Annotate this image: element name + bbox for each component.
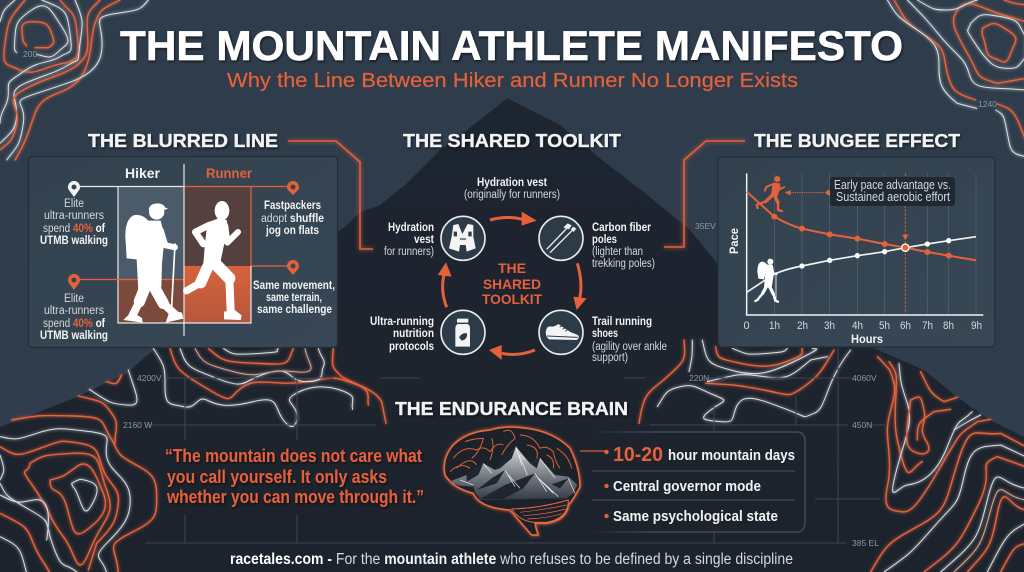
x axis labels: 3h bbox=[824, 320, 835, 332]
hiker label: Hiker bbox=[125, 165, 161, 181]
icon: trail shoe bbox=[539, 310, 583, 354]
quote: you call yourself. It only asks bbox=[167, 466, 387, 487]
fact: mountain days bbox=[604, 444, 795, 466]
pin: fastpackers bbox=[287, 181, 299, 195]
text: same movement: Same movement, bbox=[253, 280, 335, 292]
x axis labels bbox=[744, 320, 982, 332]
elevation labels: 1240 bbox=[978, 99, 997, 109]
icon: carbon poles bbox=[539, 216, 583, 260]
runner silhouette bbox=[187, 201, 242, 320]
quote: “The mountain does not care what bbox=[165, 445, 422, 466]
text: carbon fiber poles: Carbon fiber bbox=[592, 222, 651, 234]
text: walking top: spend 40% of bbox=[43, 223, 105, 235]
text: walking bottom bbox=[40, 293, 108, 342]
text: nutrition protocols: nutrition bbox=[393, 328, 434, 340]
contour lines: top left bbox=[0, 0, 148, 160]
x axis labels: 2h bbox=[797, 320, 808, 332]
y axis label: Pace bbox=[729, 228, 741, 254]
quote bbox=[165, 445, 424, 507]
text: carbon fiber poles: poles bbox=[592, 234, 617, 246]
runner column background bbox=[184, 187, 251, 266]
center label: TOOLKIT bbox=[482, 291, 542, 307]
center label: THE bbox=[498, 260, 526, 276]
text: walking bottom: UTMB walking bbox=[40, 330, 108, 342]
heading: the blurred line: THE BLURRED LINE bbox=[88, 130, 278, 151]
hiker silhouette bbox=[123, 203, 183, 323]
title: THE MOUNTAIN ATHLETE MANIFESTO bbox=[120, 22, 903, 69]
contour lines: bottom left bbox=[0, 370, 157, 572]
elevation labels: 220N bbox=[689, 373, 709, 383]
icon: nutrition bottle bbox=[441, 310, 485, 354]
text: trail running shoes: (agility over ankle bbox=[592, 341, 667, 353]
x axis labels: 9h bbox=[971, 320, 982, 332]
panel: the blurred line bbox=[28, 156, 338, 348]
heading: the endurance brain: THE ENDURANCE BRAIN bbox=[395, 398, 628, 419]
text: trail running shoes: support) bbox=[592, 352, 628, 364]
connector: toolkit to bungee bbox=[664, 141, 745, 247]
text: nutrition protocols: Ultra-running bbox=[370, 316, 434, 328]
pin: walking top bbox=[68, 181, 80, 197]
text: carbon fiber poles: trekking poles) bbox=[592, 258, 655, 270]
panel: the shared toolkit bbox=[370, 177, 667, 364]
text: walking top: Elite bbox=[64, 198, 84, 210]
fact: mountain days: 10-20 bbox=[613, 444, 663, 466]
callout bbox=[830, 177, 955, 206]
x axis labels: 5h bbox=[879, 320, 890, 332]
heading: the shared toolkit: THE SHARED TOOLKIT bbox=[403, 130, 622, 151]
elevation labels: 200 bbox=[23, 49, 37, 59]
icon: brain with mountains bbox=[444, 427, 580, 535]
x axis labels: 0 bbox=[744, 320, 750, 332]
text: hydration vest top: Hydration vest bbox=[477, 177, 547, 189]
hiker icon on chart bbox=[755, 259, 778, 302]
elevation labels: 450N bbox=[852, 420, 872, 430]
quote: whether you can move through it.” bbox=[166, 486, 424, 507]
chart: pace over hours bbox=[729, 173, 983, 346]
subtitle: Why the Line Between Hiker and Runner No Longer Exists bbox=[227, 69, 798, 92]
fact: psychological state: Same psychological state bbox=[613, 509, 778, 525]
contour lines: top right bbox=[887, 0, 1024, 157]
connector: brain to list bbox=[580, 450, 606, 452]
heading: the bungee effect: THE BUNGEE EFFECT bbox=[754, 130, 961, 151]
elevation labels: 4200V bbox=[137, 373, 162, 383]
text: walking bottom: spend 40% of bbox=[43, 318, 105, 330]
text: fastpackers bbox=[261, 200, 324, 237]
x axis labels: 1h bbox=[769, 320, 780, 332]
x axis labels: 4h bbox=[852, 320, 863, 332]
elevation labels: 2160 W bbox=[123, 420, 152, 430]
text: hydration vest left: vest bbox=[414, 234, 434, 246]
text: hydration vest top bbox=[464, 177, 560, 201]
icon: hydration vest bbox=[441, 216, 485, 260]
pin: walking bottom bbox=[68, 274, 80, 290]
text: walking bottom: Elite bbox=[64, 293, 84, 305]
fact: central governor: Central governor mode bbox=[613, 479, 761, 495]
elevation labels: 35EV bbox=[695, 221, 716, 231]
text: walking top: UTMB walking bbox=[40, 235, 108, 247]
callout: Early pace advantage vs. bbox=[834, 178, 951, 192]
text: same movement: same challenge bbox=[257, 304, 332, 316]
contour lines: centre left bbox=[153, 348, 386, 426]
text: trail running shoes: Trail running bbox=[592, 316, 652, 328]
frame lines bbox=[80, 164, 288, 336]
center label bbox=[482, 260, 542, 307]
callout: Sustained aerobic effort bbox=[836, 190, 950, 204]
pin: same movement bbox=[287, 260, 299, 275]
hiker lower band bbox=[118, 279, 184, 323]
text: carbon fiber poles: (lighter than bbox=[592, 246, 643, 258]
center label: SHARED bbox=[483, 276, 541, 292]
text: hydration vest left bbox=[384, 222, 434, 258]
x axis labels: 6h bbox=[900, 320, 911, 332]
text: walking top: ultra-runners bbox=[44, 210, 104, 222]
text: fastpackers: jog on flats bbox=[265, 225, 319, 237]
runner icon on chart bbox=[757, 176, 784, 211]
text: hydration vest left: for runners) bbox=[384, 246, 434, 258]
fact: mountain days: hour mountain days bbox=[668, 448, 795, 464]
contour lines: centre right and bottom right bbox=[639, 340, 1024, 572]
text: carbon fiber poles bbox=[592, 222, 655, 270]
text: hydration vest left: Hydration bbox=[388, 222, 434, 234]
text: trail running shoes bbox=[592, 316, 667, 364]
text: walking top bbox=[40, 198, 108, 247]
panel: brain facts bbox=[590, 432, 805, 532]
x axis labels: 8h bbox=[943, 320, 954, 332]
arrows cycle bbox=[438, 212, 587, 360]
text: walking bottom: ultra-runners bbox=[44, 305, 104, 317]
x axis labels: 7h bbox=[922, 320, 933, 332]
runner label: Runner bbox=[206, 165, 253, 181]
panel: the bungee effect bbox=[718, 157, 995, 347]
elevation labels: 4060V bbox=[852, 373, 877, 383]
footer: racetales.com - For the mountain athlete who refuses to be defined by a single discipline bbox=[230, 551, 793, 568]
text: same movement: same terrain, bbox=[266, 292, 322, 304]
text: hydration vest top: (originally for runners) bbox=[464, 189, 560, 201]
text: nutrition protocols bbox=[370, 316, 434, 353]
elevation labels: 385 EL bbox=[852, 538, 879, 548]
connector: blurred line to toolkit bbox=[288, 141, 373, 249]
text: trail running shoes: shoes bbox=[592, 328, 618, 340]
text: fastpackers: Fastpackers bbox=[264, 200, 321, 212]
runner lower band bbox=[184, 266, 251, 323]
hiker column background bbox=[118, 187, 184, 279]
text: fastpackers: adopt shuffle bbox=[261, 213, 324, 225]
x axis title: Hours bbox=[851, 332, 883, 346]
text: same movement bbox=[253, 280, 335, 316]
text: nutrition protocols: protocols bbox=[389, 341, 434, 353]
